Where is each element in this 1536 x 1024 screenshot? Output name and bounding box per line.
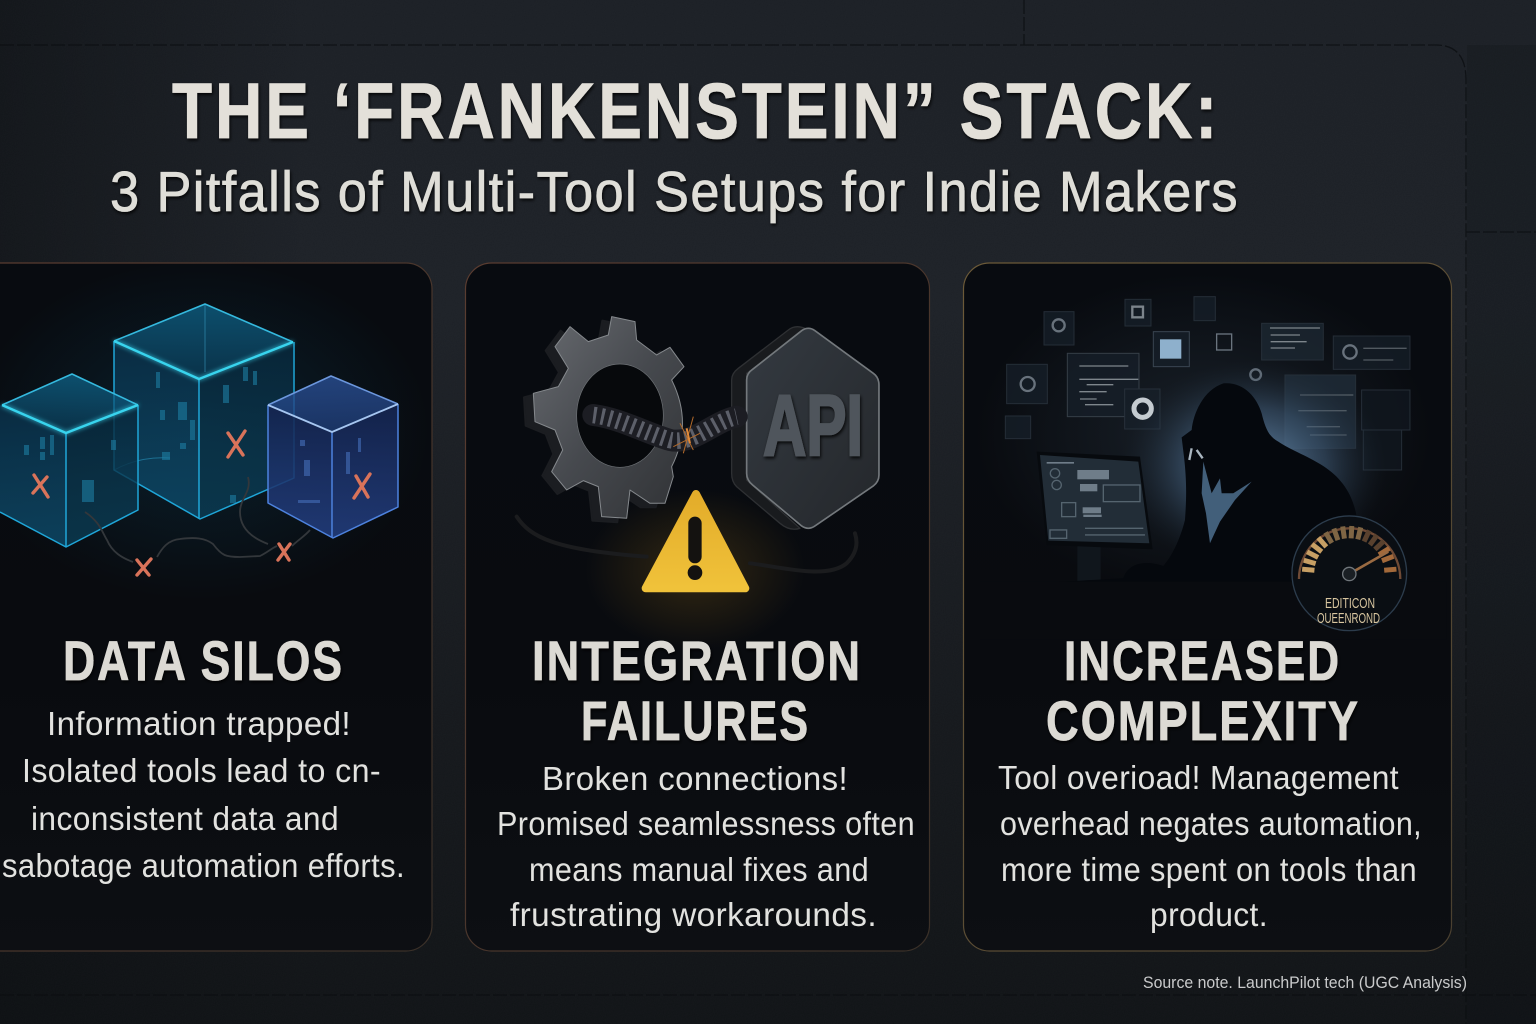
lower loose cable (517, 517, 857, 572)
source note: Source note. LaunchPilot tech (UGC Analysis) (1143, 974, 1467, 992)
body text: Isolated tools lead to cn- (22, 752, 381, 789)
body text: frustrating workarounds. (510, 896, 877, 933)
body text: means manual fixes and (529, 851, 869, 888)
card background (466, 263, 930, 951)
heading (532, 629, 862, 752)
heading: FAILURES (581, 689, 810, 752)
card background (0, 263, 432, 951)
title: THE ‘FRANKENSTEIN” STACK: (172, 66, 1220, 155)
heading (1046, 629, 1360, 752)
illustration: overwhelmed silhouette surrounded by tool windows (977, 273, 1447, 640)
body text: overhead negates automation, (1000, 805, 1422, 842)
frayed cable (593, 415, 737, 453)
API label: API (763, 378, 863, 474)
panel: data silos (0, 260, 432, 951)
red x marks (33, 431, 370, 575)
warning triangle (646, 494, 745, 588)
panel: increased complexity (964, 263, 1452, 951)
gauge label: EDITICON (1325, 595, 1375, 612)
body text: sabotage automation efforts. (2, 847, 405, 884)
left cube (0, 374, 138, 547)
heading: COMPLEXITY (1046, 689, 1360, 752)
subtitle: 3 Pitfalls of Multi-Tool Setups for Indie Makers (110, 160, 1239, 224)
API hexagon (732, 327, 879, 529)
illustration: gear and API block with frayed cable (517, 317, 879, 650)
gauge label: OUEENROND (1317, 610, 1380, 627)
right cube (268, 376, 398, 538)
body text: inconsistent data and (31, 800, 339, 837)
heading: INTEGRATION (532, 629, 862, 692)
lit gap (1202, 462, 1252, 543)
gauge (1292, 516, 1407, 631)
gauge label (1317, 595, 1380, 627)
broken wires (85, 477, 310, 562)
body text (2, 705, 405, 884)
panel: integration failures (466, 263, 930, 951)
illustration: three glass data cubes with broken wires (0, 260, 430, 600)
body text (998, 759, 1422, 933)
card background (964, 263, 1452, 951)
body text: Tool overioad! Management (998, 759, 1399, 796)
body text: product. (1150, 896, 1268, 933)
body text: Promised seamlessness often (497, 805, 915, 842)
body text: Information trapped! (47, 705, 351, 742)
body text: Broken connections! (542, 760, 848, 797)
gear (524, 317, 684, 522)
silhouette (1010, 383, 1373, 587)
floating tool windows (1005, 297, 1410, 470)
big cube (114, 304, 294, 519)
body text (497, 760, 915, 933)
heading: INCREASED (1064, 629, 1341, 692)
body text: more time spent on tools than (1001, 851, 1417, 888)
heading: DATA SILOS (63, 629, 344, 692)
monitor (1037, 452, 1153, 582)
